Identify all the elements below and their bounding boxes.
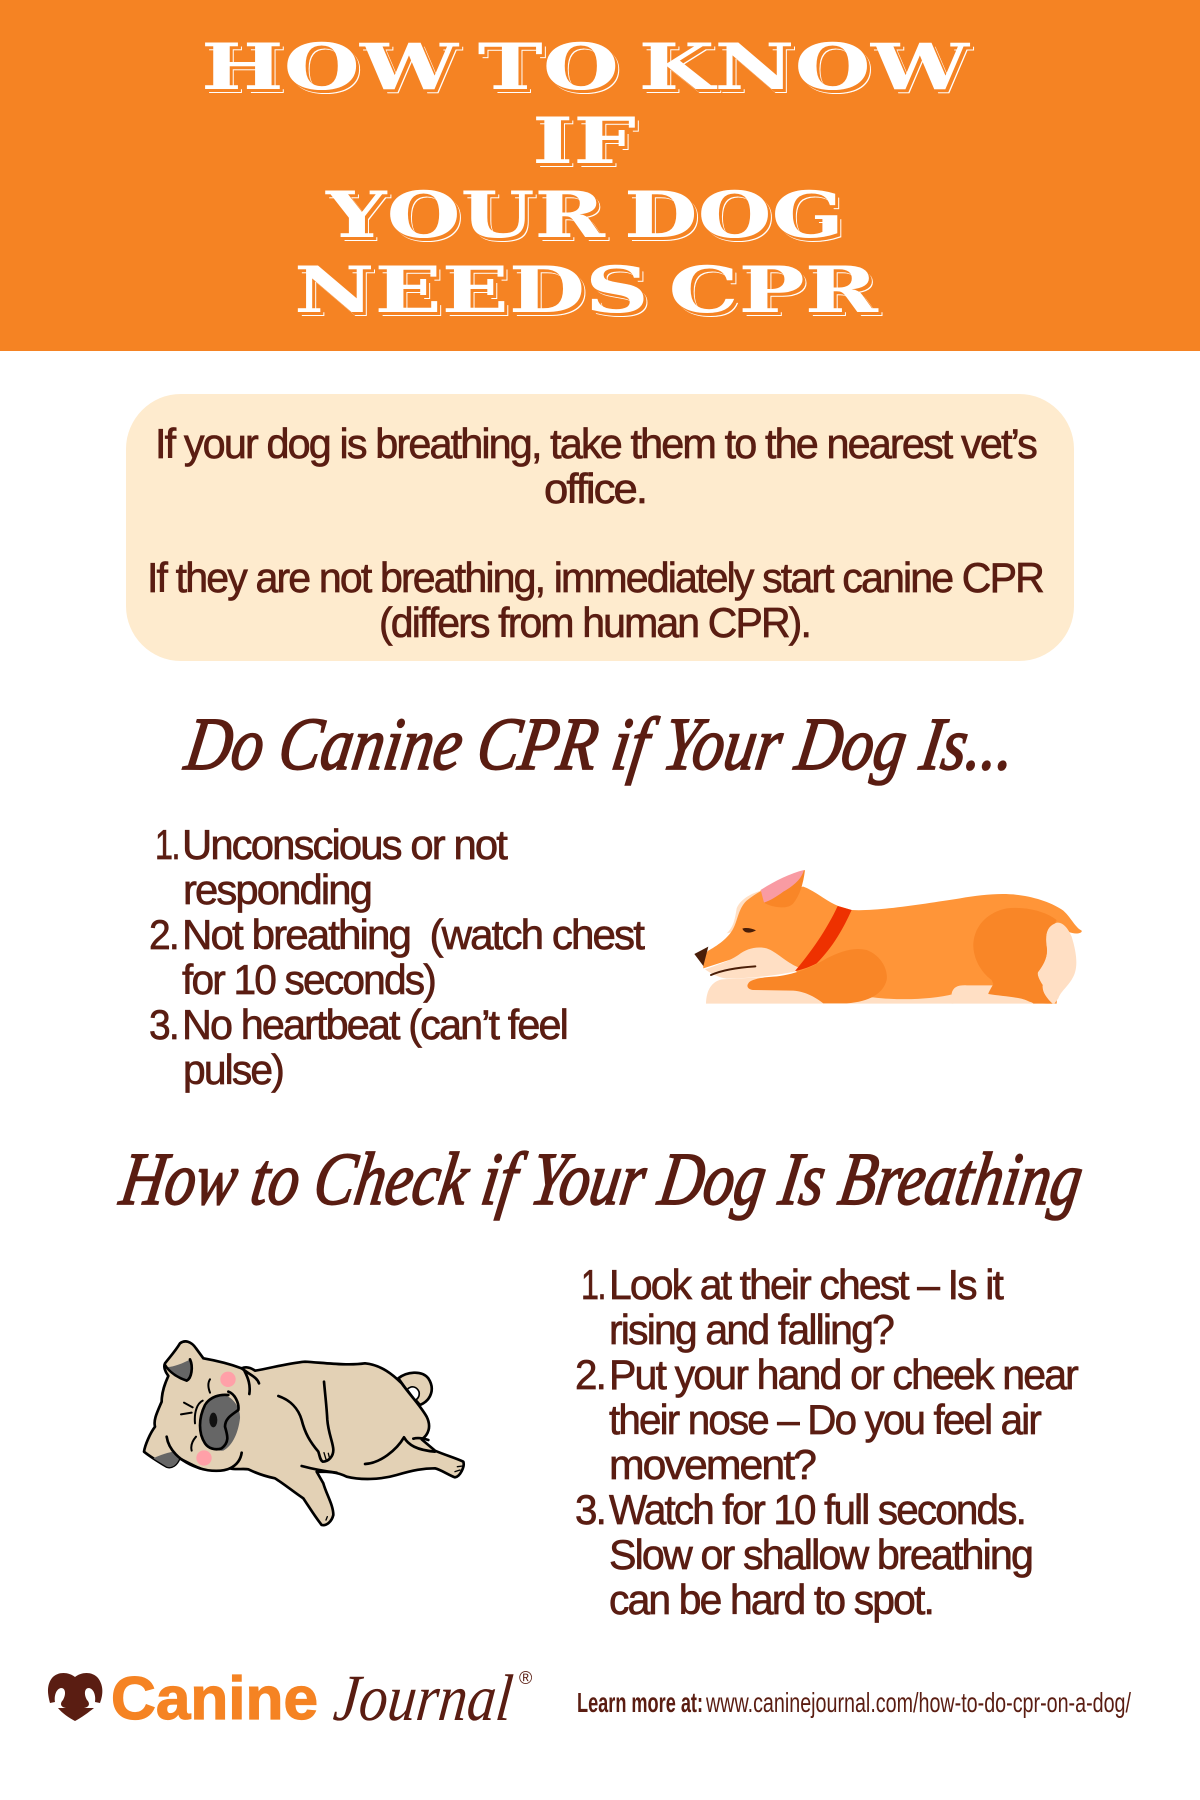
list: when to do CPR: 1.: [155, 821, 179, 868]
source link: [577, 1687, 1131, 1718]
list: how to check: 3.: [575, 1486, 605, 1533]
header band: [0, 0, 1200, 351]
logo: Canine Journal: ®: [519, 1668, 532, 1688]
illustration: sleeping corgi: [694, 870, 1082, 1005]
list: how to check: 1.: [581, 1261, 605, 1308]
list: how to check: movement?: [609, 1441, 816, 1488]
list: when to do CPR: pulse): [183, 1046, 283, 1093]
illustration: sleeping pug: [144, 1341, 464, 1525]
list: how to check: [575, 1261, 1079, 1623]
panel: breathing advice: office.: [544, 465, 646, 512]
list: when to do CPR: [149, 821, 645, 1093]
list: when to do CPR: for 10 seconds): [182, 956, 435, 1003]
panel: breathing advice: [126, 394, 1074, 661]
title: NEEDS CPR: [294, 253, 879, 328]
panel: breathing advice: If they are not breathing, immediately start canine CPR: [147, 554, 1044, 601]
list: how to check: Watch for 10 full seconds.: [609, 1486, 1025, 1533]
panel: breathing advice: If your dog is breathing, take them to the nearest vet’s: [155, 420, 1037, 467]
list: how to check: rising and falling?: [609, 1306, 894, 1353]
list: how to check: can be hard to spot.: [609, 1576, 933, 1623]
list: when to do CPR: Not breathing (watch chest: [182, 911, 645, 958]
source link: Learn more at:: [577, 1687, 703, 1718]
list: how to check: Slow or shallow breathing: [609, 1531, 1032, 1578]
list: when to do CPR: 2.: [149, 911, 178, 958]
icon: dog nose heart: [48, 1673, 102, 1721]
list: when to do CPR: No heartbeat (can’t feel: [182, 1001, 567, 1048]
panel: breathing advice: (differs from human CPR).: [379, 599, 810, 646]
list: how to check: their nose – Do you feel air: [609, 1396, 1042, 1443]
logo: Canine Journal: Canine: [111, 1665, 318, 1732]
title: HOW TO KNOW: [201, 30, 971, 105]
logo: Canine Journal: [48, 1662, 532, 1735]
title: YOUR DOG: [325, 178, 844, 253]
list: how to check: 2.: [575, 1351, 605, 1398]
list: when to do CPR: responding: [183, 866, 371, 913]
list: when to do CPR: Unconscious or not: [182, 821, 508, 868]
heading: do canine CPR: Do Canine CPR if Your Dog Is...: [179, 703, 1021, 786]
title: [201, 30, 971, 328]
title: IF: [532, 104, 636, 179]
list: how to check: Put your hand or cheek near: [609, 1351, 1079, 1398]
list: how to check: Look at their chest – Is it: [609, 1261, 1004, 1308]
list: when to do CPR: 3.: [149, 1001, 178, 1048]
logo: Canine Journal: Journal: [330, 1662, 516, 1735]
